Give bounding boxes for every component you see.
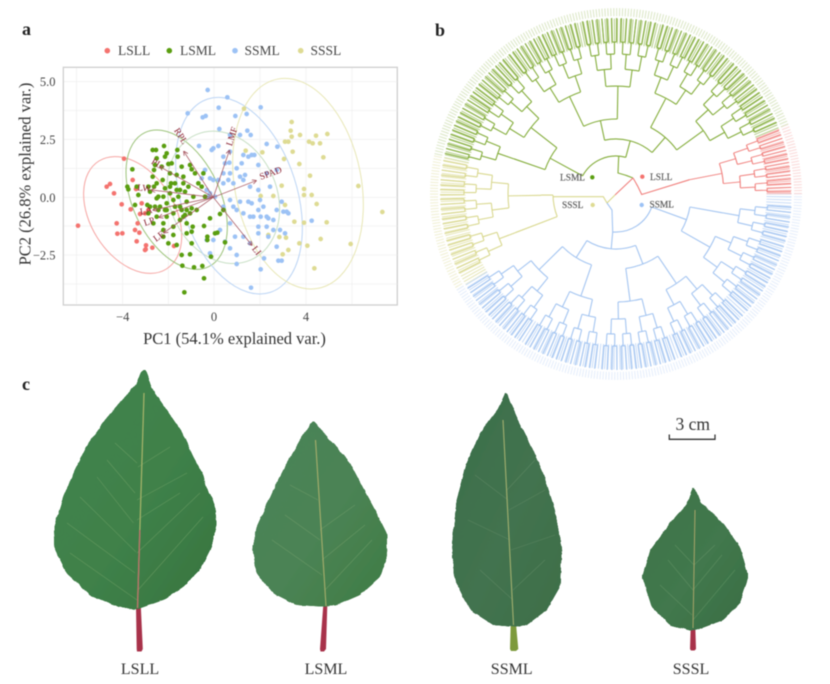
leaf captions: LSLL <box>121 661 159 678</box>
loading labels <box>137 126 284 258</box>
points: LSML <box>127 146 225 292</box>
axis tick labels: 0 <box>211 310 217 324</box>
axis tick labels: 0.0 <box>40 191 56 205</box>
clade: SSSL yellow <box>434 156 615 288</box>
legend: SSML <box>244 43 280 58</box>
x axis title: PC1 (54.1% explained var.) <box>143 329 326 348</box>
points: LSLL <box>78 159 174 250</box>
legend <box>104 43 341 58</box>
panel b: circular dendrogram <box>434 12 798 376</box>
loading labels: LMF <box>225 126 240 147</box>
axis tick labels: 2.5 <box>40 133 56 147</box>
dendrogram legend <box>560 173 674 211</box>
plot frame <box>63 67 397 305</box>
leaf captions: LSML <box>305 661 347 678</box>
leaf captions: SSSL <box>673 661 709 678</box>
axis tick labels: 4 <box>303 310 310 324</box>
axis tick labels: −4 <box>116 310 130 324</box>
loading labels: RPL <box>171 127 189 147</box>
legend: LSLL <box>118 43 150 58</box>
loading labels: LE <box>152 229 167 244</box>
panel a: PCA biplot <box>16 43 397 348</box>
dendrogram legend: LSLL <box>650 173 673 183</box>
leaf SSML <box>452 391 562 651</box>
dendrogram legend: LSML <box>560 174 585 184</box>
leaf LSLL <box>54 368 217 652</box>
panel label b: b <box>435 20 445 40</box>
loading labels: SPAD <box>258 165 284 183</box>
dendrogram legend: SSSL <box>562 201 584 211</box>
scatter points and ellipses <box>63 67 382 310</box>
loading labels: LW <box>137 183 152 195</box>
confidence ellipses <box>63 67 380 310</box>
leaf LSML <box>253 420 387 652</box>
loading labels: PL <box>149 157 164 171</box>
legend: LSML <box>180 43 216 58</box>
loading labels: LP <box>143 216 156 229</box>
panel label a: a <box>22 19 31 39</box>
clade: LSML green <box>438 12 785 180</box>
y axis title: PC2 (26.8% explained var.) <box>16 83 34 265</box>
scale bar <box>669 414 715 439</box>
legend: SSSL <box>310 43 341 58</box>
clade: LSLL red <box>615 126 798 210</box>
loading labels: LI <box>249 245 263 258</box>
points: SSML <box>188 90 312 288</box>
leaf captions: SSML <box>491 661 533 678</box>
panel c: leaf photographs <box>54 368 748 678</box>
leaf SSSL <box>642 486 748 650</box>
leaf captions <box>121 661 709 678</box>
axis tick labels <box>33 75 310 324</box>
loading arrows <box>152 151 256 245</box>
loading labels: LA <box>139 206 154 218</box>
axis tick labels: −2.5 <box>33 248 56 262</box>
clade: SSML blue <box>460 194 798 376</box>
points: SSSL <box>244 109 382 268</box>
axis tick labels: 5.0 <box>40 75 56 89</box>
scale bar: 3 cm <box>675 414 710 434</box>
panel label c: c <box>22 374 30 394</box>
dendrogram legend: SSML <box>650 200 674 210</box>
